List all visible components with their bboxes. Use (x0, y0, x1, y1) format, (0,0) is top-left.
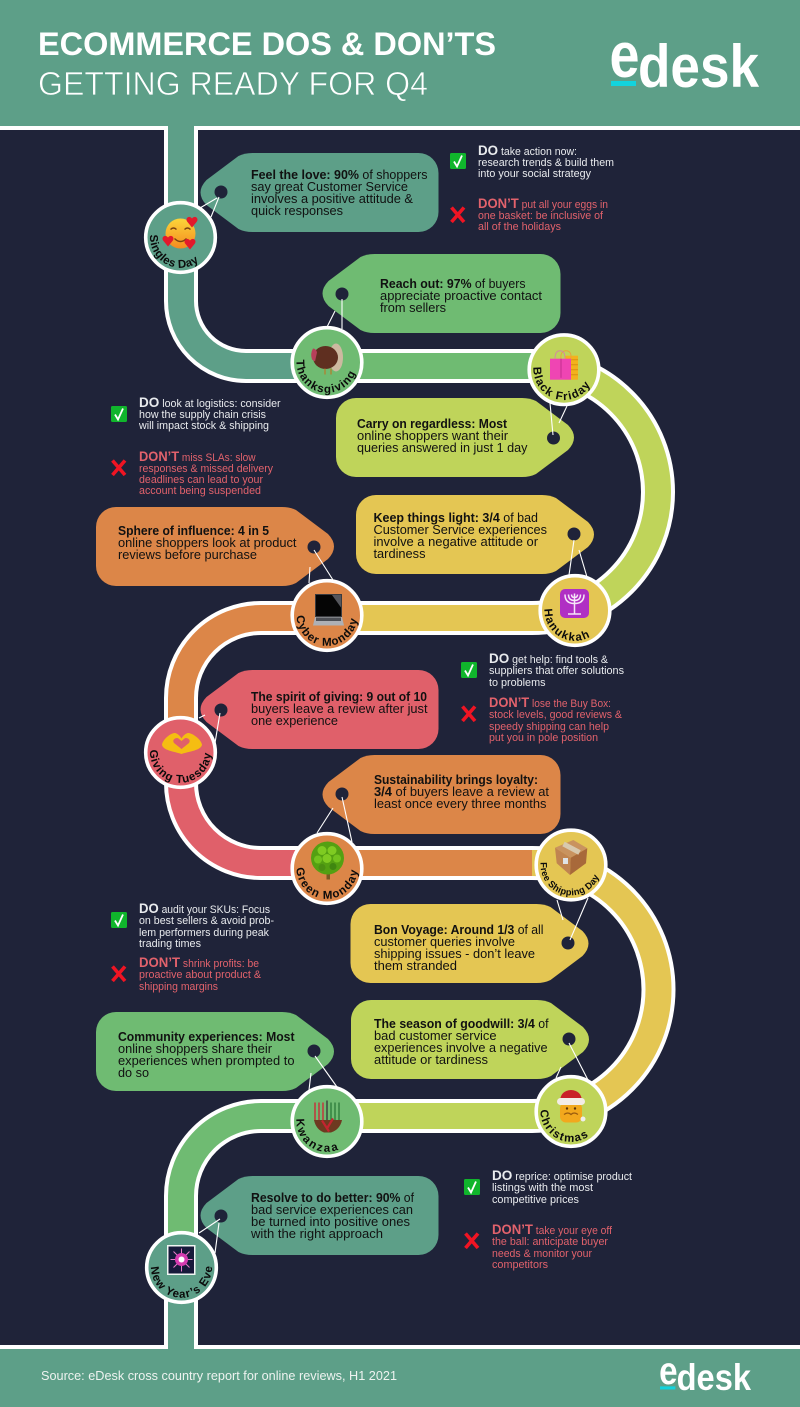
stop: Kwanzaa (290, 1084, 364, 1158)
don't text: account being suspended (139, 485, 261, 497)
do text (138, 394, 281, 432)
don't text: stock levels, good reviews & (489, 709, 623, 721)
tag: The spirit of giving: buyers leave a review after just (251, 701, 428, 716)
source note: Source: eDesk cross country report for online reviews, H1 2021 (41, 1369, 397, 1383)
icon: tree (311, 842, 344, 880)
tag: Sphere of influence: Sphere of influence: 4 in 5 (118, 523, 269, 538)
icon: cross (466, 1234, 478, 1248)
don't text (489, 694, 623, 744)
icon: cross (112, 966, 125, 981)
do text: trading times (139, 938, 201, 950)
stop: Black Friday (527, 333, 600, 406)
tag: Carry on regardless: online shoppers want their (357, 428, 509, 443)
advice block 1 (450, 142, 614, 233)
don't text: speedy shipping can help (489, 721, 609, 733)
icon: check (111, 912, 127, 928)
tag: Resolve to do better: be turned into positive ones (251, 1214, 410, 1229)
tag: Resolve to do better: bad service experiences can (251, 1202, 413, 1217)
tag: Community experiences: Community experiences: Most (118, 1029, 295, 1044)
tag: Resolve to do better: Resolve to do better: 90% of (251, 1190, 414, 1205)
tag: Feel the love: Feel the love: 90% of shoppers (251, 167, 428, 182)
tag: Community experiences: online shoppers share their (118, 1041, 273, 1056)
stop: Kwanzaa: Kwanzaa (296, 1119, 338, 1152)
tag: Keep things light (356, 495, 594, 574)
stop: Hanukkah (538, 574, 612, 648)
logo (610, 19, 760, 100)
tag: Keep things light: Customer Service experiences (374, 522, 547, 537)
do text (492, 1167, 632, 1206)
tag: Resolve to do better (200, 1176, 438, 1255)
tag: The season of goodwill (351, 1000, 589, 1079)
icon: heart hands (162, 733, 202, 754)
icon: cross (462, 706, 475, 721)
do text: DO reprice: optimise product (492, 1167, 632, 1183)
icon: check (111, 406, 127, 422)
don't text: DON’T miss SLAs: slow (139, 448, 256, 464)
icon: cross (112, 460, 125, 475)
tag: Sphere of influence: reviews before purchase (118, 547, 257, 562)
tag: Community experiences (96, 1012, 334, 1091)
header band (0, 0, 800, 130)
icon: kinara (314, 1100, 342, 1132)
do text: into your social strategy (478, 168, 591, 180)
stop: Free Shipping Day: Free Shipping Day (540, 862, 600, 898)
do text: competitive prices (492, 1194, 579, 1206)
stop: Hanukkah: Hanukkah (544, 609, 590, 641)
advice block 5 (464, 1167, 632, 1271)
tag: Feel the love: involves a positive attitude & (251, 191, 413, 206)
stop: Giving Tuesday (144, 716, 218, 790)
footer logo: desk (677, 1357, 751, 1398)
do text: to problems (489, 677, 546, 689)
tag: Bon Voyage: them stranded (374, 958, 457, 973)
tag: The spirit of giving: one experience (251, 713, 338, 728)
footer logo (659, 1349, 751, 1398)
stop: New Year's Eve (144, 1230, 218, 1304)
tag: Reach out (322, 254, 560, 333)
do text: DO look at logistics: consider (139, 394, 281, 410)
icon: laptop (313, 594, 344, 626)
icon: smiling face with hearts (163, 217, 197, 250)
tag: Sustainability brings loyalty: Sustainability brings loyalty: (374, 772, 538, 787)
tag: The season of goodwill: bad customer service (374, 1028, 496, 1043)
logo: e (610, 19, 640, 91)
do text: DO audit your SKUs: Focus (139, 900, 270, 916)
advice block 4 (111, 900, 274, 993)
do text: will impact stock & shipping (138, 420, 269, 432)
stop: Green Monday (290, 832, 364, 906)
icon: fireworks (167, 1245, 196, 1275)
icon: menorah (560, 589, 589, 618)
tag: Community experiences: do so (118, 1065, 149, 1080)
footer logo: e (659, 1349, 678, 1393)
stop: Singles Day (144, 200, 218, 274)
tag: Carry on regardless: queries answered in just 1 day (357, 440, 528, 455)
do text: how the supply chain crisis (139, 409, 266, 421)
tag: Bon Voyage: Bon Voyage: Around 1/3 of all (374, 922, 544, 937)
don't text: DON’T lose the Buy Box: (489, 694, 611, 710)
don't text: deadlines can lead to your (139, 474, 263, 486)
icon: parcel (555, 840, 587, 875)
do text: lem performers during peak (139, 927, 269, 939)
stop: New Year's Eve: New Year’s Eve (150, 1266, 212, 1298)
don't text: DON’T shrink profits: be (139, 954, 259, 970)
logo: desk (638, 33, 760, 100)
tag: Feel the love: say great Customer Service (251, 179, 408, 194)
tag: The spirit of giving: The spirit of giving: 9 out of 10 (251, 689, 427, 704)
do text: suppliers that offer solutions (489, 665, 624, 677)
don't text (139, 954, 262, 993)
don't text (139, 448, 273, 497)
tag: Keep things light: Keep things light: 3/4 of bad (374, 510, 538, 525)
stop: Cyber Monday (290, 578, 364, 652)
tag: Sustainability brings loyalty: least once every three months (374, 796, 547, 811)
do text (139, 900, 274, 950)
don't text: DON’T put all your eggs in (478, 195, 608, 211)
don't text: proactive about product & (139, 969, 262, 981)
advice block 2 (111, 394, 281, 497)
winding road (181, 126, 659, 1350)
don't text: shipping margins (139, 981, 218, 993)
do text: on best sellers & avoid prob- (139, 915, 274, 927)
don't text (492, 1221, 613, 1271)
footer band (0, 1345, 800, 1407)
don't text: responses & missed delivery (139, 463, 273, 475)
tag: The spirit of giving (200, 670, 438, 749)
stop: Cyber Monday: Cyber Monday (296, 616, 359, 646)
icon: turkey (311, 344, 343, 374)
don't text: DON’T take your eye off (492, 1221, 613, 1237)
tag: Feel the love (200, 153, 438, 232)
tag: Sphere of influence (96, 507, 334, 586)
icon: santa face (557, 1090, 586, 1122)
stop: Singles Day: Singles Day (150, 235, 198, 268)
do text: DO take action now: (478, 142, 577, 158)
tag: Sustainability brings loyalty: 3/4 of buyers leave a review at (374, 784, 549, 799)
do text: DO get help: find tools & (489, 650, 609, 666)
icon: shopping bags (550, 351, 578, 380)
tag: Bon Voyage (350, 904, 588, 983)
tag strings (199, 197, 588, 1253)
do text: research trends & build them (478, 157, 614, 169)
tag: Community experiences: experiences when prompted to (118, 1053, 294, 1068)
stop: Black Friday: Black Friday (533, 367, 590, 400)
tag: Carry on regardless (336, 398, 574, 477)
tag: Sustainability brings loyalty (322, 755, 560, 834)
stop: Thanksgiving (290, 326, 364, 400)
tag: Reach out: Reach out: 97% of buyers (380, 276, 526, 291)
don't text: the ball: anticipate buyer (492, 1236, 608, 1248)
icon: cross (452, 208, 464, 222)
tag: The season of goodwill: attitude or tardiness (374, 1052, 488, 1067)
don't text (478, 195, 608, 233)
tag: Resolve to do better: with the right approach (250, 1226, 383, 1241)
stop: Christmas: Christmas (540, 1110, 588, 1142)
advice block 3 (461, 650, 624, 744)
do text (489, 650, 624, 689)
tag: The season of goodwill: The season of goodwill: 3/4 of (374, 1016, 549, 1031)
stop: Green Monday: Green Monday (296, 868, 360, 899)
stop: Free Shipping Day (534, 828, 608, 902)
tag: Reach out: from sellers (380, 300, 446, 315)
stop: Thanksgiving: Thanksgiving (296, 360, 356, 396)
do text (478, 142, 614, 180)
tag: Keep things light: involve a negative attitude or (374, 534, 539, 549)
icon: check (461, 662, 477, 678)
title: ECOMMERCE DOS & DON’TS (38, 26, 496, 62)
tag: Keep things light: tardiness (374, 546, 426, 561)
do text: listings with the most (492, 1182, 593, 1194)
stop: Christmas (534, 1074, 608, 1148)
stop: Giving Tuesday: Giving Tuesday (150, 750, 213, 783)
tag: Reach out: appreciate proactive contact (380, 288, 542, 303)
tag: The season of goodwill: experiences involve a negative (374, 1040, 548, 1055)
icon: check (450, 153, 466, 169)
subtitle: GETTING READY FOR Q4 (38, 65, 428, 102)
don't text: needs & monitor your (492, 1248, 592, 1260)
tag: Feel the love: quick responses (251, 203, 343, 218)
don't text: all of the holidays (478, 221, 561, 233)
don't text: competitors (492, 1259, 548, 1271)
tag: Bon Voyage: shipping issues - don’t leave (374, 946, 535, 961)
tag: Sphere of influence: online shoppers look at product (118, 535, 297, 550)
tag: Carry on regardless: Carry on regardless: Most (357, 416, 508, 431)
don't text: put you in pole position (489, 732, 598, 744)
icon: check (464, 1179, 480, 1195)
tag: Bon Voyage: customer queries involve (374, 934, 515, 949)
don't text: one basket: be inclusive of (478, 210, 604, 222)
